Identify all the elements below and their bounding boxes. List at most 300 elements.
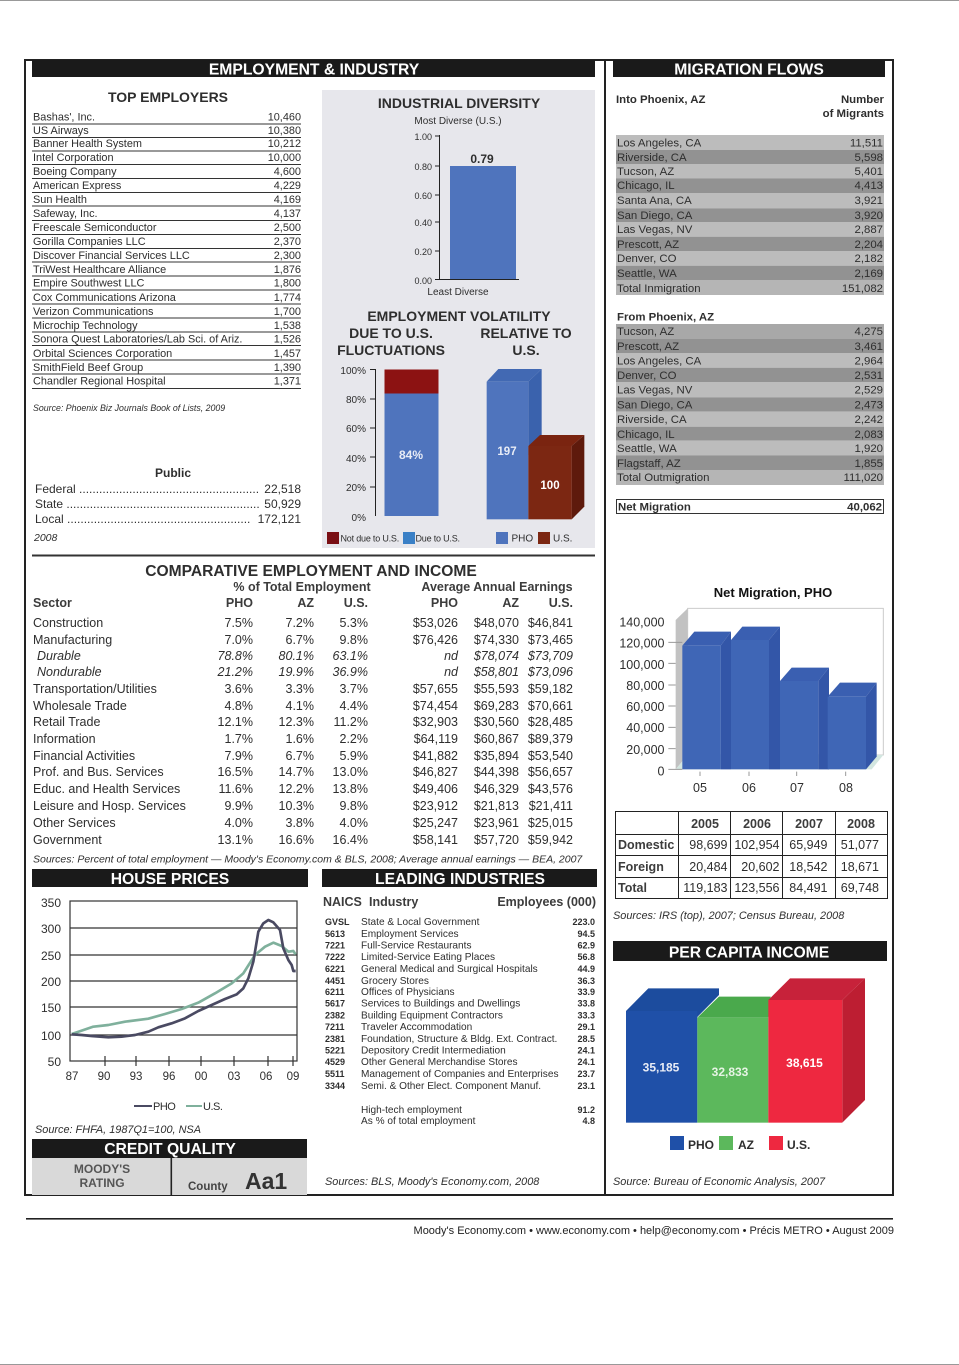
table: comparative: 7.2% bbox=[286, 616, 314, 630]
table: leading industries: Building Equipment Contractors bbox=[361, 1010, 503, 1022]
table: comparative: 3.6% bbox=[224, 682, 253, 696]
legend: per capita income: PHO bbox=[688, 1138, 714, 1152]
table: from Phoenix: 1,920 bbox=[854, 443, 883, 455]
footer: Moody's Economy.com • www.economy.com • help@economy.com • Précis METRO • August 2009 bbox=[414, 1225, 894, 1237]
table: comparative: Retail Trade bbox=[33, 715, 100, 729]
chart: house prices line chart: 200 bbox=[41, 975, 61, 989]
table: comparative: Sector bbox=[33, 596, 72, 610]
table: comparative: $43,576 bbox=[528, 782, 573, 796]
table: domestic and foreign migration: 119,183 bbox=[683, 881, 728, 895]
panel: house prices bbox=[32, 869, 308, 1136]
table: comparative: $28,485 bbox=[528, 715, 573, 729]
table: comparative: 16.6% bbox=[279, 833, 314, 847]
table: comparative: $41,882 bbox=[413, 749, 458, 763]
table: leading industries: 5617 bbox=[325, 998, 345, 1008]
table: into Phoenix: Total Inmigration bbox=[617, 283, 701, 295]
heading: employment volatility: EMPLOYMENT VOLATILITY bbox=[367, 308, 551, 324]
table: leading industries: 91.2 bbox=[577, 1105, 595, 1115]
callout: net migration: Net Migration bbox=[618, 502, 691, 514]
table: leading industries: 44.9 bbox=[577, 964, 595, 974]
heading: employment volatility: RELATIVE TO bbox=[480, 325, 572, 341]
table: comparative: $46,841 bbox=[528, 616, 573, 630]
table: comparative: nd bbox=[444, 649, 459, 663]
text: rating bbox=[74, 1162, 287, 1194]
table: top employers: 4,600 bbox=[274, 166, 301, 178]
table: top employers: Cox Communications Arizona bbox=[33, 292, 177, 304]
table: domestic and foreign migration: 2005 bbox=[691, 817, 719, 831]
table: comparative: 13.0% bbox=[333, 765, 368, 779]
panel: leading industries bbox=[322, 869, 597, 1188]
table: domestic and foreign migration: Total bbox=[618, 881, 647, 895]
chart: net migration bar chart: 06 bbox=[742, 781, 756, 795]
table: leading industries: 4451 bbox=[325, 976, 345, 986]
chart: house prices line chart: 93 bbox=[130, 1071, 142, 1083]
table: leading industries: 33.9 bbox=[577, 987, 595, 997]
table: comparative: 80.1% bbox=[279, 649, 314, 663]
panel: diversity and volatility background bbox=[322, 90, 595, 548]
table: comparative: 1.7% bbox=[224, 732, 253, 746]
table: leading industries: 3344 bbox=[325, 1081, 345, 1091]
table: top employers: 1,876 bbox=[274, 264, 301, 276]
table: comparative: $46,329 bbox=[474, 782, 519, 796]
chart: net migration bar chart: Net Migration, PHO bbox=[714, 585, 832, 600]
chart: house prices line chart: 06 bbox=[260, 1071, 272, 1083]
table: leading industries: Foundation, Structure & Bldg. Ext. Contract. bbox=[361, 1034, 557, 1045]
table: comparative: Educ. and Health Services bbox=[33, 782, 180, 796]
table: into Phoenix: Denver, CO bbox=[617, 253, 677, 265]
chart: net migration bar chart: 05 bbox=[693, 781, 707, 795]
callout: net migration bbox=[616, 500, 884, 514]
table: leading industries: Limited-Service Eating Places bbox=[361, 952, 495, 963]
heading: migration flows: MIGRATION FLOWS bbox=[674, 62, 824, 78]
chart: volatility due to U.S. fluctuations: 40% bbox=[346, 454, 366, 465]
text: rating: Aa1 bbox=[245, 1168, 287, 1194]
table: leading industries: 56.8 bbox=[577, 952, 595, 962]
heading: house prices bbox=[32, 869, 308, 888]
table: top employers: Sonora Quest Laboratories/Lab Sci. of Ariz. bbox=[33, 334, 242, 346]
chart: net migration bar chart: 120,000 bbox=[619, 636, 665, 650]
page frame bbox=[25, 60, 893, 1195]
table: comparative: $56,657 bbox=[528, 765, 573, 779]
table: comparative: 13.8% bbox=[333, 782, 368, 796]
table: comparative: 9.8% bbox=[340, 799, 368, 813]
chart: volatility due to U.S. fluctuations: 80% bbox=[346, 395, 366, 406]
text: rating: RATING bbox=[79, 1176, 125, 1190]
table: comparative: 6.7% bbox=[286, 633, 314, 647]
table: comparative: $57,655 bbox=[413, 682, 458, 696]
panel: per capita income bbox=[613, 941, 887, 1188]
table: domestic and foreign migration: 20,484 bbox=[689, 860, 728, 874]
table: into Phoenix: 2,887 bbox=[854, 224, 883, 236]
chart: industrial diversity: Least Diverse bbox=[427, 287, 489, 298]
table: domestic and foreign migration: 102,954 bbox=[734, 838, 780, 852]
table: leading industries: Full-Service Restaurants bbox=[361, 940, 472, 952]
table: comparative: $69,283 bbox=[474, 699, 519, 713]
table: comparative: AZ bbox=[297, 596, 314, 610]
table: comparative: $25,247 bbox=[413, 816, 458, 830]
chart: house prices line chart: 350 bbox=[41, 896, 61, 910]
table: into Phoenix: Riverside, CA bbox=[617, 152, 687, 164]
legend: house prices: PHO bbox=[153, 1101, 176, 1113]
table: comparative: 19.9% bbox=[279, 665, 314, 679]
table: into Phoenix: Seattle, WA bbox=[617, 268, 677, 280]
table: leading industries: Employees (000) bbox=[497, 895, 596, 909]
table: domestic and foreign migration: Foreign bbox=[618, 860, 664, 874]
table: leading industries: NAICS bbox=[323, 895, 362, 909]
table: comparative: $35,894 bbox=[474, 749, 519, 763]
table: comparative: 78.8% bbox=[218, 649, 253, 663]
table: from Phoenix: 2,242 bbox=[854, 414, 883, 426]
legend: volatility charts: U.S. bbox=[553, 534, 572, 544]
table: comparative: $74,330 bbox=[474, 633, 519, 647]
table: top employers: 1,390 bbox=[274, 362, 301, 374]
table: top employers: Discover Financial Services LLC bbox=[33, 250, 190, 262]
table: from Phoenix: Las Vegas, NV bbox=[617, 384, 693, 396]
chart: net migration bar chart: 60,000 bbox=[626, 700, 665, 714]
panel: per capita income: Source: Bureau of Economic Analysis, 2007 bbox=[613, 1176, 826, 1188]
table: top employers: 1,538 bbox=[274, 320, 301, 332]
heading: employment volatility: DUE TO U.S. bbox=[349, 325, 433, 341]
table: comparative: 12.2% bbox=[279, 782, 314, 796]
table: from Phoenix: 4,275 bbox=[854, 326, 883, 338]
chart: net migration bar chart: 40,000 bbox=[626, 721, 665, 735]
chart: volatility due to U.S. fluctuations: 84% bbox=[399, 448, 423, 462]
heading: per capita income bbox=[613, 941, 887, 962]
chart: house prices line chart bbox=[35, 896, 299, 1136]
table: leading industries: 23.7 bbox=[577, 1069, 595, 1079]
table: leading industries: Industry bbox=[369, 895, 418, 909]
table: comparative: 9.9% bbox=[224, 799, 253, 813]
table: leading industries: 4529 bbox=[325, 1057, 345, 1067]
heading: credit quality: CREDIT QUALITY bbox=[104, 1141, 236, 1158]
table: domestic and foreign migration: 18,542 bbox=[789, 860, 828, 874]
chart: industrial diversity: 0.60 bbox=[414, 191, 432, 201]
table: public employment: Federal ...................................................... bbox=[35, 482, 259, 496]
table: domestic and foreign migration bbox=[613, 811, 888, 922]
table: into Phoenix: 151,082 bbox=[842, 283, 883, 295]
table: public employment: Public bbox=[155, 466, 191, 480]
table: from Phoenix: From Phoenix, AZ bbox=[617, 312, 714, 324]
table: top employers: Bashas', Inc. bbox=[33, 112, 95, 124]
table: comparative: Government bbox=[33, 833, 102, 847]
table: comparative: 11.6% bbox=[218, 782, 253, 796]
table: leading industries: 24.1 bbox=[577, 1046, 595, 1056]
table: leading industries: 2382 bbox=[325, 1010, 345, 1020]
table: leading industries: State & Local Government bbox=[361, 917, 480, 928]
chart: per capita income bars bbox=[626, 978, 865, 1123]
heading: employment volatility: U.S. bbox=[512, 342, 540, 358]
panel: comparative employment and income bbox=[33, 563, 583, 866]
table: comparative: $30,560 bbox=[474, 715, 519, 729]
table: leading industries: 94.5 bbox=[577, 929, 595, 939]
table: into Phoenix: Las Vegas, NV bbox=[617, 224, 693, 236]
table: domestic and foreign migration: Sources: IRS (top), 2007; Census Bureau, 2008 bbox=[613, 910, 844, 922]
table: into Phoenix: 4,413 bbox=[854, 180, 883, 192]
table: leading industries: Grocery Stores bbox=[361, 976, 429, 987]
table: leading industries: 6221 bbox=[325, 964, 345, 974]
chart: volatility relative to U.S.: 100 bbox=[540, 480, 560, 492]
table: comparative: Manufacturing bbox=[33, 633, 112, 647]
legend: volatility charts: Due to U.S. bbox=[416, 534, 460, 544]
table: leading industries: High-tech employment bbox=[361, 1105, 462, 1116]
table: comparative: 11.2% bbox=[333, 715, 368, 729]
table: comparative: $53,026 bbox=[413, 616, 458, 630]
table: comparative: 4.8% bbox=[224, 699, 253, 713]
table: comparative: 1.6% bbox=[286, 732, 314, 746]
table: from Phoenix: 2,083 bbox=[854, 429, 883, 441]
table: leading industries: 33.3 bbox=[577, 1010, 595, 1020]
table: comparative: Sources: Percent of total employment — Moody's Economy.com & BLS, 2008; Average annual earnings — BEA, 2007 bbox=[33, 854, 583, 866]
chart: volatility due to U.S. fluctuations: 20% bbox=[346, 483, 366, 494]
table: into Phoenix: Into Phoenix, AZ bbox=[616, 94, 705, 106]
legend: per capita income bbox=[670, 1136, 810, 1152]
table: top employers: American Express bbox=[33, 180, 122, 192]
table: into Phoenix: 5,598 bbox=[854, 152, 883, 164]
table: leading industries: Semi. & Other Elect. Component Manuf. bbox=[361, 1081, 541, 1092]
table: into Phoenix: Los Angeles, CA bbox=[617, 138, 702, 150]
chart: house prices line chart: 50 bbox=[48, 1055, 61, 1069]
table: comparative: nd bbox=[444, 665, 459, 679]
table: top employers: TOP EMPLOYERS bbox=[108, 89, 228, 105]
table: comparative: $59,942 bbox=[528, 833, 573, 847]
chart: industrial diversity: 1.00 bbox=[414, 132, 432, 142]
table: top employers: Sun Health bbox=[33, 194, 87, 206]
table: comparative: $73,709 bbox=[527, 649, 573, 663]
table: top employers: 1,371 bbox=[274, 376, 301, 388]
table: leading industries: 5613 bbox=[325, 929, 345, 939]
text: rating: County bbox=[188, 1181, 228, 1193]
table: leading industries: 29.1 bbox=[577, 1022, 595, 1032]
table: comparative: $58,141 bbox=[413, 833, 458, 847]
table: comparative: 5.9% bbox=[340, 749, 368, 763]
table: top employers: 1,800 bbox=[274, 278, 301, 290]
table: from Phoenix: Tucson, AZ bbox=[617, 326, 674, 338]
table: leading industries: Depository Credit Intermediation bbox=[361, 1046, 506, 1056]
chart: house prices line chart: 87 bbox=[66, 1071, 78, 1083]
table: leading industries: 36.3 bbox=[577, 976, 595, 986]
table: leading industries: 4.8 bbox=[582, 1116, 595, 1126]
table: top employers: 1,457 bbox=[274, 348, 301, 360]
table: from Phoenix: Denver, CO bbox=[617, 370, 677, 382]
table: into Phoenix: Chicago, IL bbox=[617, 180, 675, 192]
table: comparative: PHO bbox=[431, 596, 458, 610]
table: top employers: 2,500 bbox=[274, 222, 301, 234]
table: comparative: $46,827 bbox=[413, 765, 458, 779]
legend: house prices: U.S. bbox=[203, 1101, 223, 1113]
table: top employers: 1,526 bbox=[274, 334, 301, 346]
legend: volatility charts: Not due to U.S. bbox=[340, 534, 399, 544]
table: comparative: $59,182 bbox=[528, 682, 573, 696]
chart: net migration bar chart: 08 bbox=[839, 781, 853, 795]
table: from Phoenix: Total Outmigration bbox=[617, 472, 709, 484]
table: leading industries: 223.0 bbox=[572, 917, 595, 927]
heading: migration flows bbox=[613, 60, 885, 78]
chart: house prices line chart: 150 bbox=[41, 1001, 61, 1015]
table: top employers: Chandler Regional Hospital bbox=[33, 376, 166, 388]
table: top employers: 10,212 bbox=[268, 138, 301, 150]
table: public employment bbox=[33, 466, 301, 544]
chart: net migration bar chart: 20,000 bbox=[626, 743, 665, 757]
chart: house prices line chart: 09 bbox=[287, 1071, 299, 1083]
table: leading industries: General Medical and Surgical Hospitals bbox=[361, 964, 538, 975]
chart: net migration bar chart: 07 bbox=[790, 781, 804, 795]
table: comparative: $23,912 bbox=[413, 799, 458, 813]
table: into Phoenix: Tucson, AZ bbox=[617, 166, 674, 178]
table: comparative: 4.0% bbox=[340, 816, 368, 830]
chart: volatility relative to U.S. bbox=[487, 369, 584, 519]
table: comparative: 16.5% bbox=[218, 765, 253, 779]
table: comparative: 14.7% bbox=[279, 765, 314, 779]
table: comparative: $70,661 bbox=[528, 699, 573, 713]
table: comparative: U.S. bbox=[549, 596, 573, 610]
table: comparative: 2.2% bbox=[340, 732, 368, 746]
table: comparative: $25,015 bbox=[528, 816, 573, 830]
table: comparative: $78,074 bbox=[473, 649, 519, 663]
table: domestic and foreign migration: Domestic bbox=[618, 838, 674, 852]
table: comparative: Prof. and Bus. Services bbox=[33, 765, 164, 779]
table: comparative: Leisure and Hosp. Services bbox=[33, 799, 186, 813]
table: comparative: 7.9% bbox=[224, 749, 253, 763]
table: from Phoenix: 111,020 bbox=[844, 472, 883, 484]
table: top employers: Source: Phoenix Biz Journals Book of Lists, 2009 bbox=[33, 403, 225, 413]
table: from Phoenix bbox=[616, 312, 884, 485]
table: top employers: Verizon Communications bbox=[33, 306, 154, 318]
table: top employers: 10,460 bbox=[268, 112, 301, 124]
table: domestic and foreign migration: 123,556 bbox=[734, 881, 780, 895]
chart: volatility due to U.S. fluctuations bbox=[340, 366, 438, 524]
table: from Phoenix: San Diego, CA bbox=[617, 400, 693, 412]
chart: net migration bar chart: 140,000 bbox=[619, 616, 665, 630]
chart: house prices line chart: 96 bbox=[163, 1071, 175, 1083]
table: top employers: Orbital Sciences Corporation bbox=[33, 348, 172, 360]
table: comparative: $55,593 bbox=[474, 682, 519, 696]
table: leading industries bbox=[323, 895, 596, 1188]
table: top employers: SmithField Beef Group bbox=[33, 362, 143, 374]
table: comparative: 3.3% bbox=[286, 682, 314, 696]
table: comparative: 12.1% bbox=[218, 715, 253, 729]
table: top employers bbox=[32, 89, 301, 413]
table: into Phoenix: 3,921 bbox=[854, 195, 883, 207]
table: leading industries: 7211 bbox=[325, 1022, 345, 1032]
table: top employers: Freescale Semiconductor bbox=[33, 222, 157, 234]
table: from Phoenix: 2,529 bbox=[854, 384, 883, 396]
heading: house prices: HOUSE PRICES bbox=[111, 871, 229, 888]
table: public employment: 22,518 bbox=[264, 482, 301, 496]
chart: net migration bar chart bbox=[619, 585, 883, 795]
table: leading industries: Sources: BLS, Moody's Economy.com, 2008 bbox=[325, 1176, 539, 1188]
table: top employers: 4,137 bbox=[274, 208, 301, 220]
table: comparative: $44,398 bbox=[474, 765, 519, 779]
table: comparative: 3.8% bbox=[286, 816, 314, 830]
chart: house prices line chart: 250 bbox=[41, 949, 61, 963]
table: from Phoenix: 2,531 bbox=[854, 370, 883, 382]
table: comparative: $32,903 bbox=[413, 715, 458, 729]
chart: per capita income bars: 38,615 bbox=[786, 1056, 823, 1070]
table: from Phoenix: 1,855 bbox=[854, 458, 883, 470]
table: comparative: PHO bbox=[226, 596, 253, 610]
chart: net migration bar chart: 0 bbox=[658, 764, 665, 778]
heading: employment and industry: EMPLOYMENT & INDUSTRY bbox=[209, 62, 420, 78]
chart: house prices line chart: 03 bbox=[228, 1071, 240, 1083]
table: into Phoenix bbox=[616, 94, 885, 295]
table: comparative: 63.1% bbox=[333, 649, 368, 663]
chart: per capita income bars: 35,185 bbox=[643, 1060, 680, 1074]
table: top employers: Safeway, Inc. bbox=[33, 208, 98, 220]
table: public employment: State .......................................................... bbox=[35, 497, 260, 511]
table: comparative: $53,540 bbox=[528, 749, 573, 763]
table: leading industries: 7221 bbox=[325, 940, 345, 950]
table: leading industries: 28.5 bbox=[577, 1034, 595, 1044]
table: from Phoenix: 2,964 bbox=[854, 356, 883, 368]
table: comparative: Nondurable bbox=[37, 665, 102, 679]
heading: employment volatility: FLUCTUATIONS bbox=[337, 342, 445, 358]
table: from Phoenix: Los Angeles, CA bbox=[617, 356, 702, 368]
table: comparative: 13.1% bbox=[218, 833, 253, 847]
legend: house prices bbox=[134, 1101, 223, 1113]
table: top employers: Boeing Company bbox=[33, 166, 117, 178]
table: comparative: $73,096 bbox=[527, 665, 573, 679]
table: from Phoenix: 3,461 bbox=[854, 341, 883, 353]
table: comparative: % of Total Employment bbox=[233, 580, 371, 594]
table: into Phoenix: Number bbox=[841, 94, 885, 106]
table: domestic and foreign migration: 2007 bbox=[795, 817, 823, 831]
table: top employers: 1,774 bbox=[274, 292, 301, 304]
table: comparative: $21,813 bbox=[474, 799, 519, 813]
heading: leading industries bbox=[322, 869, 597, 888]
table: comparative: $48,070 bbox=[474, 616, 519, 630]
table: domestic and foreign migration: 51,077 bbox=[841, 838, 879, 852]
table: into Phoenix: Santa Ana, CA bbox=[617, 195, 692, 207]
table: comparative: 21.2% bbox=[217, 665, 253, 679]
table: leading industries: 23.1 bbox=[577, 1081, 595, 1091]
heading: per capita income: PER CAPITA INCOME bbox=[669, 944, 829, 962]
table: comparative: $76,426 bbox=[413, 633, 458, 647]
table: from Phoenix: Chicago, IL bbox=[617, 429, 675, 441]
table: top employers: 10,000 bbox=[268, 152, 301, 164]
table: top employers: Gorilla Companies LLC bbox=[33, 236, 146, 248]
table: top employers: Intel Corporation bbox=[33, 152, 114, 164]
text: rating: MOODY'S bbox=[74, 1162, 130, 1176]
table: comparative bbox=[33, 580, 583, 866]
table: comparative: 36.9% bbox=[333, 665, 368, 679]
table: leading industries: 5221 bbox=[325, 1046, 345, 1056]
chart: industrial diversity: 0.79 bbox=[470, 152, 494, 166]
table: top employers: 10,380 bbox=[268, 125, 301, 137]
table: comparative: AZ bbox=[502, 596, 519, 610]
table: top employers: Microchip Technology bbox=[33, 320, 138, 332]
chart: house prices line chart: 90 bbox=[98, 1071, 110, 1083]
table: domestic and foreign migration: 2006 bbox=[743, 817, 771, 831]
table: leading industries: GVSL bbox=[325, 917, 350, 927]
table: public employment: 2008 bbox=[33, 532, 58, 544]
chart: industrial diversity: 0.20 bbox=[414, 247, 432, 257]
table: into Phoenix: San Diego, CA bbox=[617, 210, 693, 222]
chart: volatility due to U.S. fluctuations: 0% bbox=[352, 513, 366, 524]
table: comparative: $23,961 bbox=[474, 816, 519, 830]
table: comparative: $74,454 bbox=[413, 699, 458, 713]
table: into Phoenix: 11,511 bbox=[850, 138, 883, 150]
table: comparative: 5.3% bbox=[340, 616, 368, 630]
table: into Phoenix: 2,182 bbox=[854, 253, 883, 265]
panel: migration flows bbox=[613, 60, 885, 514]
table: comparative: 4.4% bbox=[340, 699, 368, 713]
table: comparative: 4.0% bbox=[224, 816, 253, 830]
panel: employment and industry bbox=[32, 60, 595, 548]
table: leading industries: 2381 bbox=[325, 1034, 345, 1044]
table: public employment: 50,929 bbox=[264, 497, 301, 511]
table: leading industries: Offices of Physicians bbox=[361, 987, 455, 998]
table: top employers: US Airways bbox=[33, 125, 89, 137]
